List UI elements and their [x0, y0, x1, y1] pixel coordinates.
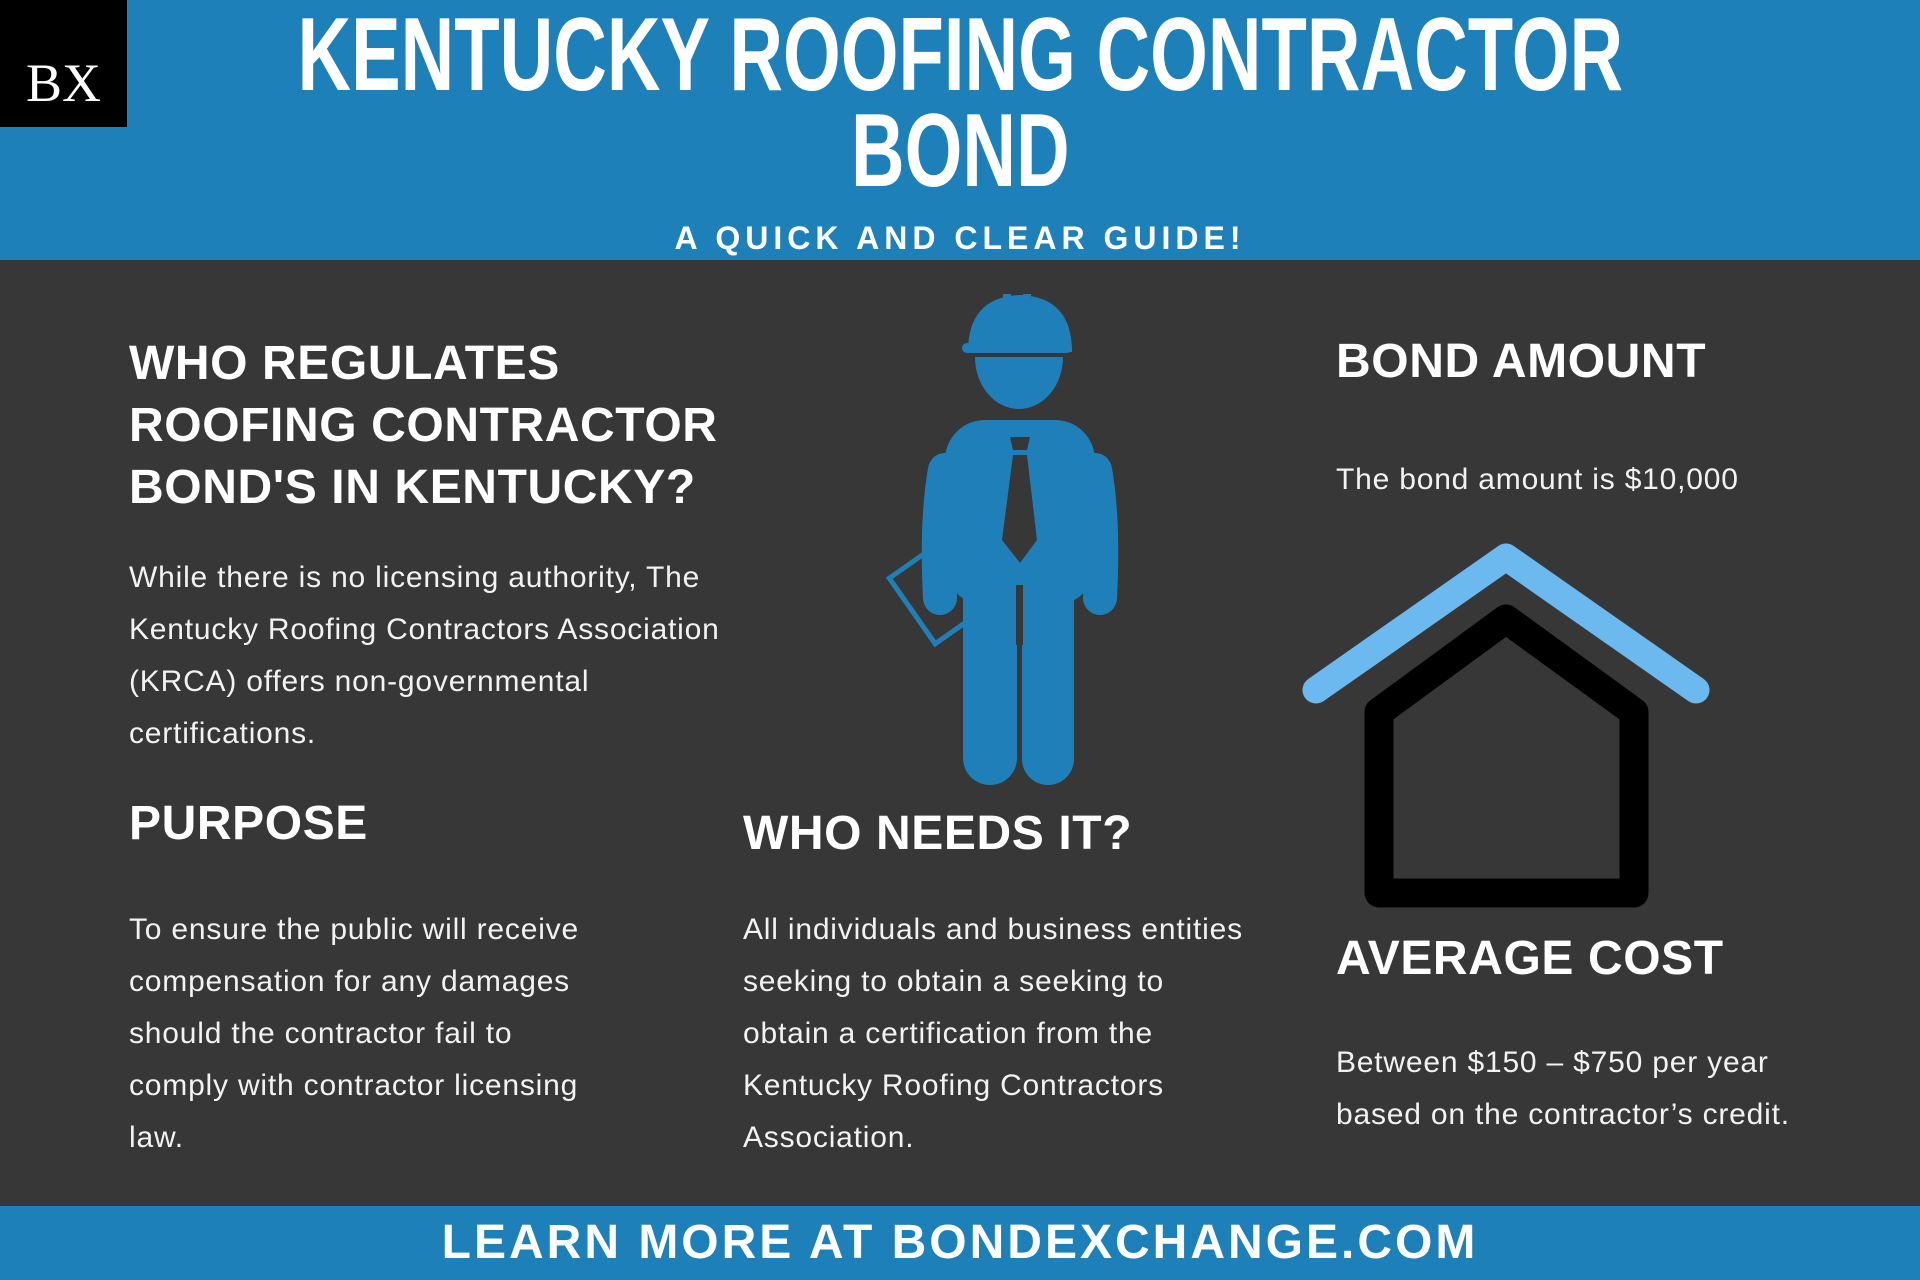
text: average cost: Between $150 – $750 per year	[1336, 1046, 1769, 1079]
heading: who needs it: WHO NEEDS IT?	[743, 807, 1132, 860]
logo BX: BX	[26, 53, 101, 113]
title	[297, 0, 1623, 209]
icon: contractor	[889, 294, 1101, 785]
text: who needs it: seeking to obtain a seeking to	[743, 965, 1164, 998]
text: who needs it: obtain a certification from the	[743, 1017, 1153, 1050]
text: who regulates	[129, 561, 720, 750]
heading: bond amount: BOND AMOUNT	[1336, 335, 1706, 388]
title: BOND	[851, 93, 1069, 209]
heading: who regulates: BOND'S IN KENTUCKY?	[129, 461, 696, 514]
text: purpose: compensation for any damages	[129, 965, 570, 998]
logo BX	[0, 0, 127, 127]
text: who regulates: (KRCA) offers non-governmental	[129, 665, 589, 698]
heading: purpose: PURPOSE	[129, 797, 368, 850]
text: bond amount: The bond amount is $10,000	[1336, 463, 1739, 496]
heading: average cost: AVERAGE COST	[1336, 932, 1724, 985]
heading: who regulates: ROOFING CONTRACTOR	[129, 399, 718, 452]
text: who needs it: Kentucky Roofing Contractors	[743, 1069, 1164, 1102]
text: who needs it	[743, 913, 1243, 1154]
text: average cost	[1336, 1046, 1790, 1131]
text: purpose: should the contractor fail to	[129, 1017, 512, 1050]
footer	[0, 1206, 1920, 1280]
header band	[0, 0, 1920, 260]
text: purpose	[129, 913, 579, 1154]
text: average cost: based on the contractor’s credit.	[1336, 1098, 1790, 1131]
heading: who regulates: WHO REGULATES	[129, 337, 560, 390]
title: KENTUCKY ROOFING CONTRACTOR	[297, 0, 1623, 113]
text: purpose: comply with contractor licensing	[129, 1069, 578, 1102]
footer: LEARN MORE AT BONDEXCHANGE.COM	[442, 1216, 1478, 1269]
subtitle: A QUICK AND CLEAR GUIDE!	[675, 220, 1245, 256]
text: who regulates: certifications.	[129, 717, 316, 750]
text: who needs it: All individuals and business entities	[743, 913, 1243, 946]
heading: who regulates	[129, 337, 718, 514]
icon: house	[1316, 557, 1696, 893]
text: who regulates: While there is no licensing authority, The	[129, 561, 700, 594]
text: purpose: To ensure the public will receive	[129, 913, 579, 946]
text: who needs it: Association.	[743, 1121, 914, 1154]
text: who regulates: Kentucky Roofing Contractors Association	[129, 613, 720, 646]
text: purpose: law.	[129, 1121, 184, 1154]
